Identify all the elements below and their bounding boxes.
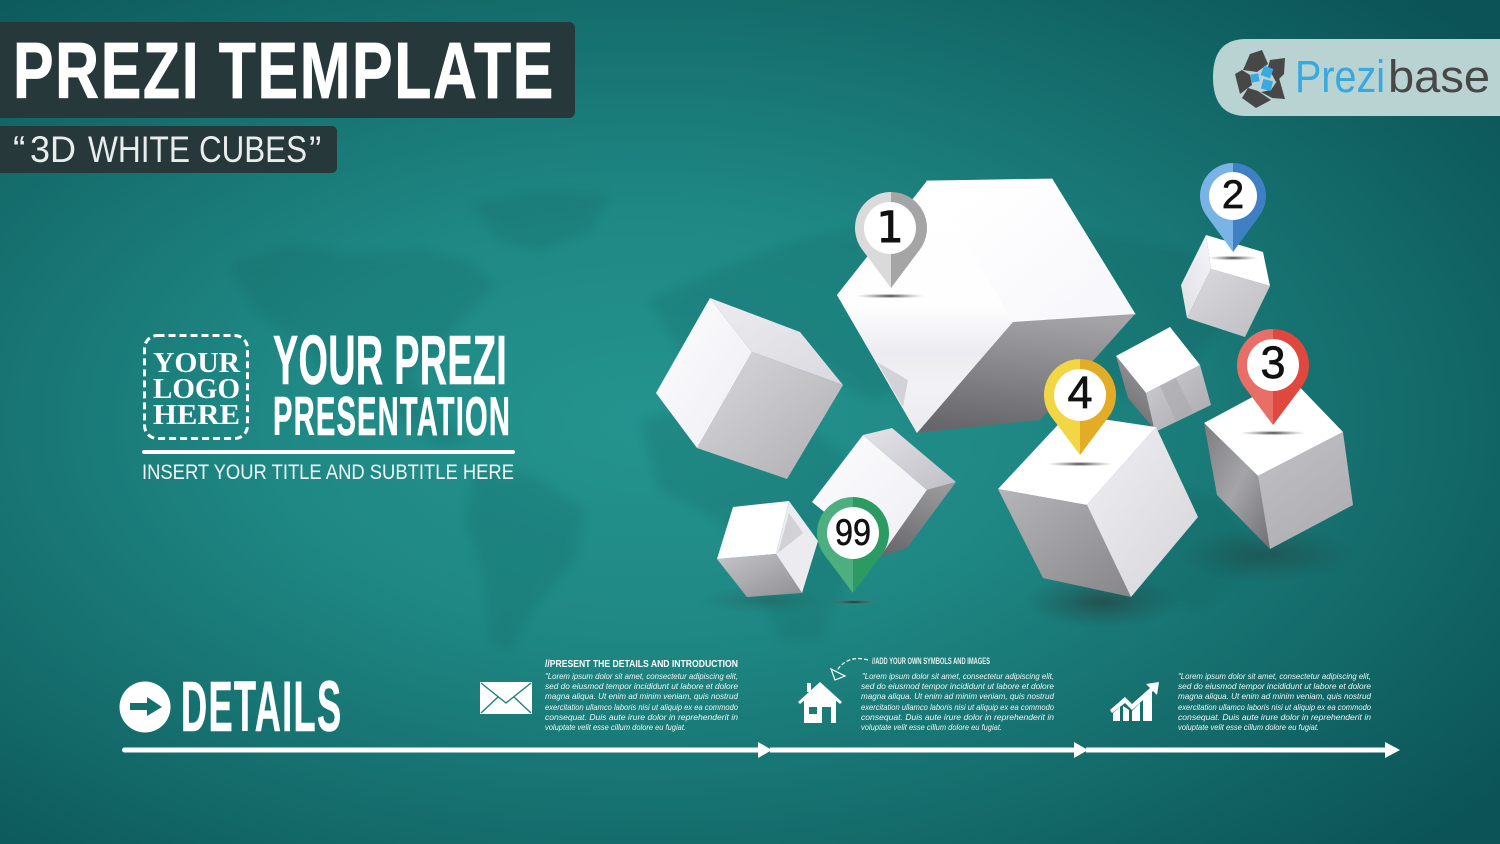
logo placeholder	[144, 336, 248, 438]
heading rule	[142, 450, 515, 454]
world map watermark	[230, 190, 1260, 650]
presentation heading: PRESENTATION	[273, 386, 510, 447]
pin 2: 2	[1222, 173, 1244, 217]
presentation heading	[273, 321, 510, 447]
text block: introduction: exercitation ullamco laboris nisi ut aliquip ex ea commodo	[545, 702, 738, 712]
subtitle banner	[0, 126, 337, 173]
icon: circle arrow	[120, 682, 170, 732]
cube: left large	[656, 298, 843, 479]
pin 4: 4	[1067, 367, 1093, 418]
subtitle banner: CUBES	[199, 129, 307, 170]
text block: introduction: "Lorem ipsum dolor sit amet, consectetur adipiscing elit,	[545, 671, 738, 681]
timeline arrows	[122, 742, 1400, 758]
text block: third column: voluptate velit esse cillum dolore eu fugiat.	[1178, 722, 1319, 732]
text block: symbols and images: exercitation ullamco laboris nisi ut aliquip ex ea commodo	[861, 702, 1054, 712]
icon: growth chart	[1110, 682, 1159, 721]
text block: symbols and images: "Lorem ipsum dolor sit amet, consectetur adipiscing elit,	[862, 671, 1054, 681]
icon: envelope	[480, 682, 532, 714]
cube: centre under pin 4	[998, 414, 1198, 597]
text block: introduction	[545, 659, 738, 732]
subtitle banner: 3D	[30, 129, 76, 170]
text block: third column: sed do eiusmod tempor incididunt ut labore et dolore	[1178, 681, 1371, 691]
subtitle banner: WHITE	[88, 129, 190, 170]
text block: third column: exercitation ullamco laboris nisi ut aliquip ex ea commodo	[1178, 702, 1371, 712]
pin 3: 3	[1260, 337, 1286, 388]
presentation heading: YOUR PREZI	[273, 321, 507, 399]
text block: symbols and images: //ADD YOUR OWN SYMBOLS AND IMAGES	[872, 656, 990, 667]
pin 1	[855, 192, 927, 298]
icon: Prezibase star	[1235, 50, 1285, 108]
pin 2	[1200, 163, 1266, 260]
wordmark: Prezi	[1295, 51, 1385, 102]
cube: lower left small	[717, 501, 818, 597]
cube: small upper right	[1181, 235, 1270, 337]
text block: symbols and images: sed do eiusmod tempor incididunt ut labore et dolore	[861, 681, 1054, 691]
pin 99: 99	[835, 512, 871, 553]
title banner: PREZI TEMPLATE	[13, 27, 553, 116]
text block: introduction: sed do eiusmod tempor incididunt ut labore et dolore	[545, 681, 738, 691]
cube: right under pin 3	[1204, 377, 1353, 549]
text block: introduction: //PRESENT THE DETAILS AND INTRODUCTION	[545, 659, 738, 670]
icon: house	[798, 682, 842, 723]
curved dashed arrow	[831, 658, 868, 680]
cube: small middle right	[1116, 327, 1211, 432]
text block: introduction: consequat. Duis aute irure dolor in reprehenderit in	[545, 712, 738, 722]
text block: third column: magna aliqua. Ut enim ad minim veniam, quis nostrud	[1178, 691, 1371, 701]
text block: symbols and images: consequat. Duis aute irure dolor in reprehenderit in	[861, 712, 1054, 722]
pin 99	[817, 497, 889, 604]
details heading: DETAILS	[181, 667, 341, 746]
text block: third column: "Lorem ipsum dolor sit amet, consectetur adipiscing elit,	[1178, 671, 1371, 681]
text block: introduction: magna aliqua. Ut enim ad minim veniam, quis nostrud	[545, 691, 738, 701]
pin 4	[1044, 359, 1116, 466]
presentation subtitle: INSERT YOUR TITLE AND SUBTITLE HERE	[142, 461, 514, 484]
logo placeholder: LOGO	[153, 373, 240, 405]
cube: big centre	[837, 179, 1135, 433]
text block: third column	[1178, 671, 1371, 732]
subtitle banner: “	[13, 129, 25, 170]
text block: third column: consequat. Duis aute irure dolor in reprehenderit in	[1178, 712, 1371, 722]
wordmark: base	[1388, 51, 1490, 102]
pin 3	[1237, 329, 1309, 436]
ground shadows below cubes	[700, 527, 1358, 628]
text block: symbols and images	[861, 656, 1054, 732]
Prezibase logo	[1213, 39, 1500, 116]
pin 1: 1	[876, 203, 904, 253]
subtitle banner: ”	[309, 129, 321, 170]
text block: symbols and images: voluptate velit esse cillum dolore eu fugiat.	[861, 722, 1002, 732]
cube: behind pin 99	[812, 428, 956, 557]
text block: symbols and images: magna aliqua. Ut enim ad minim veniam, quis nostrud	[861, 691, 1054, 701]
text block: introduction: voluptate velit esse cillum dolore eu fugiat.	[545, 722, 686, 732]
logo placeholder: YOUR	[153, 347, 241, 379]
logo placeholder: HERE	[153, 399, 240, 431]
